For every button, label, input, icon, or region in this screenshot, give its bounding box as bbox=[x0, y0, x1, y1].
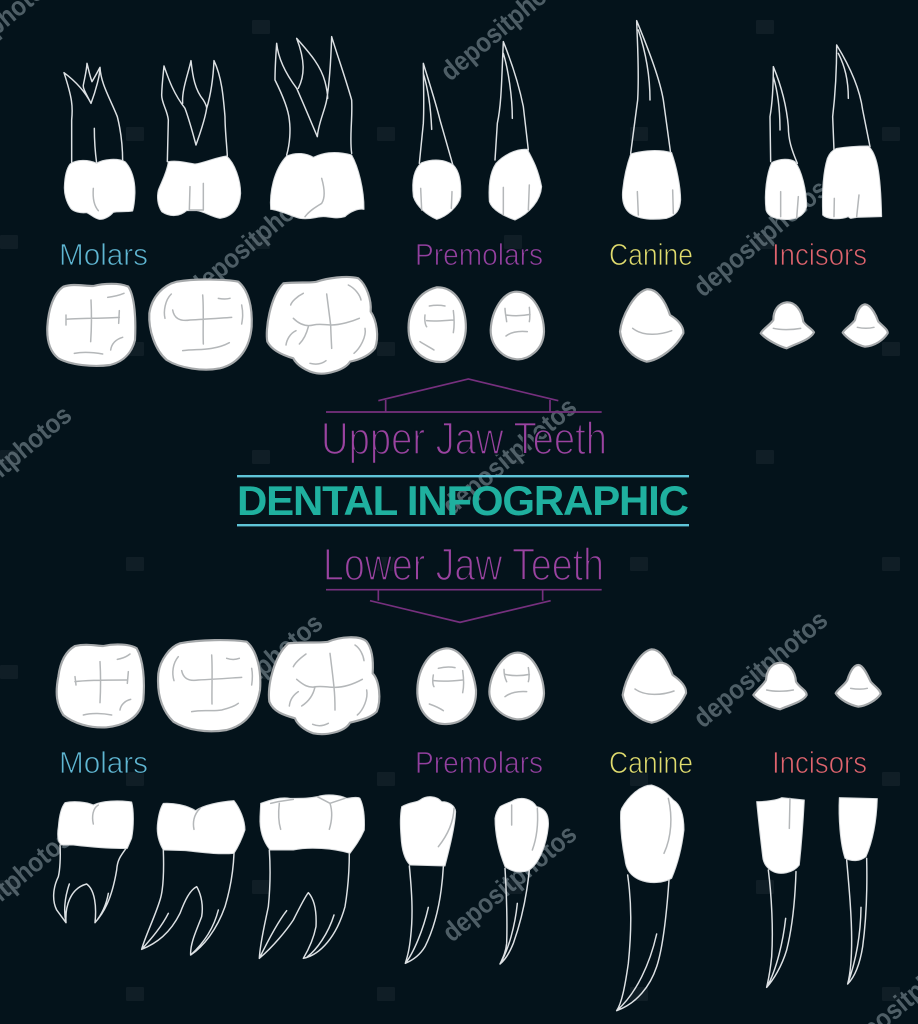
upper molar 1 side view bbox=[64, 63, 135, 219]
upper canine occlusal bbox=[620, 289, 683, 362]
label: upper premolars: Premolars bbox=[415, 237, 543, 272]
label: lower molars: Molars bbox=[59, 745, 148, 780]
label: lower canine: Canine bbox=[609, 745, 693, 780]
lower molar 2 side view bbox=[142, 801, 245, 955]
central heading block bbox=[237, 379, 689, 622]
lower premolar 1 side view bbox=[400, 797, 456, 963]
heading: lower jaw teeth: Lower Jaw Teeth bbox=[323, 539, 604, 590]
lower frame ornament bbox=[326, 590, 602, 622]
lower molar 1 occlusal bbox=[57, 644, 144, 727]
lower molars bbox=[54, 637, 379, 958]
lower incisor 1 occlusal bbox=[753, 663, 807, 709]
lower row labels bbox=[59, 745, 867, 780]
upper row labels bbox=[59, 237, 867, 272]
upper premolars canine incisors bbox=[409, 21, 888, 362]
lower premolar 2 side view bbox=[495, 798, 548, 964]
label: upper molars: Molars bbox=[59, 237, 148, 272]
watermarks: depositphotos bbox=[183, 608, 328, 737]
watermarks: depositphotos bbox=[437, 392, 582, 521]
lower canine occlusal bbox=[623, 649, 686, 723]
upper premolar 1 occlusal bbox=[409, 287, 466, 362]
watermarks: depositphotos bbox=[688, 174, 833, 303]
lower molar 3 side view bbox=[259, 795, 364, 958]
label: lower incisors: Incisors bbox=[772, 745, 867, 780]
title rule top bbox=[237, 475, 689, 477]
label: upper canine: Canine bbox=[609, 237, 693, 272]
lower incisor 1 side view bbox=[757, 798, 804, 987]
upper molar 3 occlusal bbox=[267, 277, 377, 374]
watermarks: depositphotos bbox=[688, 605, 833, 734]
lower incisor 2 side view bbox=[839, 798, 877, 984]
lower premolars canine incisors bbox=[400, 648, 881, 1011]
title rule bottom bbox=[237, 524, 689, 526]
lower canine side view bbox=[617, 785, 684, 1011]
watermarks: depositphotos bbox=[437, 819, 582, 948]
upper molar 1 occlusal bbox=[47, 284, 135, 366]
lower premolar 2 occlusal bbox=[489, 653, 544, 719]
lower molar 3 occlusal bbox=[269, 637, 379, 734]
title: DENTAL INFOGRAPHIC bbox=[237, 477, 689, 524]
upper incisor 1 side view bbox=[765, 67, 807, 219]
upper incisor 2 occlusal bbox=[843, 304, 888, 347]
upper premolar 2 occlusal bbox=[491, 292, 544, 359]
lower molar 1 side view bbox=[54, 801, 133, 923]
upper canine side view bbox=[622, 21, 681, 219]
upper premolar 2 side view bbox=[489, 42, 542, 220]
label: lower premolars: Premolars bbox=[415, 745, 543, 780]
upper molar 2 occlusal bbox=[149, 280, 252, 370]
upper premolar 1 side view bbox=[413, 63, 461, 219]
lower premolar 1 occlusal bbox=[417, 648, 476, 724]
lower molar 2 occlusal bbox=[158, 640, 260, 731]
upper molar 3 side view bbox=[270, 37, 364, 219]
upper incisor 1 occlusal bbox=[761, 302, 814, 348]
watermarks: depositphotos bbox=[183, 174, 328, 303]
upper molar 2 side view bbox=[157, 61, 241, 218]
label: upper incisors: Incisors bbox=[772, 237, 867, 272]
heading: upper jaw teeth: Upper Jaw Teeth bbox=[321, 413, 607, 464]
upper frame ornament bbox=[326, 379, 602, 412]
upper incisor 2 side view bbox=[822, 45, 882, 219]
lower incisor 2 occlusal bbox=[836, 665, 881, 707]
upper molars bbox=[47, 37, 377, 374]
